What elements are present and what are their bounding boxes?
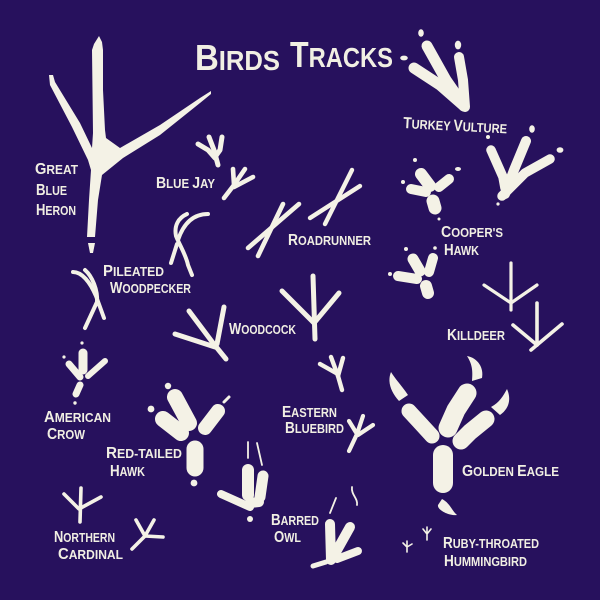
label: red-tailed hawk <box>106 445 182 480</box>
track: killdeer 2 <box>513 303 562 350</box>
label: barred owl <box>271 512 319 546</box>
label: woodcock: WOODCOCK <box>229 321 296 338</box>
label: northern cardinal <box>54 529 123 563</box>
track: blue jay 1 <box>198 137 222 165</box>
track: eastern bluebird 2 <box>349 416 373 451</box>
label: turkey vulture: TURKEY VULTURE <box>403 115 508 137</box>
track: northern cardinal 1 <box>64 488 101 522</box>
label: eastern bluebird: EASTERN <box>282 404 337 421</box>
label: northern cardinal: CARDINAL <box>58 546 123 563</box>
track: barred owl 2 <box>313 487 358 566</box>
label: cooper's hawk: COOPER'S <box>441 224 503 241</box>
track: woodcock 2 <box>282 276 339 339</box>
label: pileated woodpecker <box>103 263 191 297</box>
label: barred owl: OWL <box>274 529 301 546</box>
track: ruby-throated hummingbird <box>403 527 431 552</box>
title <box>195 34 393 78</box>
label: american crow <box>44 409 111 443</box>
label: red-tailed hawk: HAWK <box>110 463 145 480</box>
track: northern cardinal 2 <box>132 520 163 549</box>
track: killdeer 1 <box>484 263 537 310</box>
label: red-tailed hawk: RED-TAILED <box>106 445 182 462</box>
label: american crow: CROW <box>47 426 86 443</box>
label: northern cardinal: NORTHERN <box>54 529 115 546</box>
track: cooper's hawk 2 <box>388 246 437 293</box>
track: red-tailed hawk <box>148 383 229 486</box>
label: blue jay: BLUE JAY <box>156 175 215 192</box>
track: woodcock 1 <box>175 307 226 359</box>
label: american crow: AMERICAN <box>44 409 111 426</box>
track: pileated woodpecker 2 <box>73 270 104 328</box>
track: turkey vulture 2 <box>486 125 563 206</box>
label: roadrunner: ROADRUNNER <box>288 232 372 249</box>
track: blue jay 2 <box>224 169 253 198</box>
track: golden eagle <box>389 356 509 515</box>
label: pileated woodpecker: WOODPECKER <box>110 280 191 297</box>
label: ruby-throated hummingbird: HUMMINGBIRD <box>444 553 527 570</box>
track: eastern bluebird 1 <box>320 357 343 390</box>
track: cooper's hawk 1 <box>401 158 461 220</box>
track: american crow <box>62 341 105 405</box>
label: cooper's hawk <box>441 224 503 259</box>
label: golden eagle: GOLDEN EAGLE <box>462 463 559 480</box>
label: pileated woodpecker: PILEATED <box>103 263 164 280</box>
title: BIRDS <box>195 37 280 78</box>
label: ruby-throated hummingbird <box>443 535 539 570</box>
track: turkey vulture 1 <box>400 29 465 107</box>
title: TRACKS <box>290 34 393 75</box>
label: great blue heron: HERON <box>36 202 76 219</box>
label: great blue heron: BLUE <box>36 182 67 199</box>
track: pileated woodpecker 1 <box>171 214 208 275</box>
track: barred owl 1 <box>221 442 263 522</box>
label: killdeer: KILLDEER <box>447 327 506 344</box>
track: great blue heron <box>49 36 211 253</box>
label: barred owl: BARRED <box>271 512 319 529</box>
label: great blue heron: GREAT <box>35 161 78 178</box>
label: eastern bluebird <box>282 404 344 437</box>
track: roadrunner 2 <box>310 170 360 224</box>
label: great blue heron <box>35 161 78 219</box>
label: cooper's hawk: HAWK <box>444 242 479 259</box>
label: eastern bluebird: BLUEBIRD <box>285 420 344 437</box>
label: ruby-throated hummingbird: RUBY-THROATED <box>443 535 539 552</box>
track: roadrunner 1 <box>248 204 299 256</box>
